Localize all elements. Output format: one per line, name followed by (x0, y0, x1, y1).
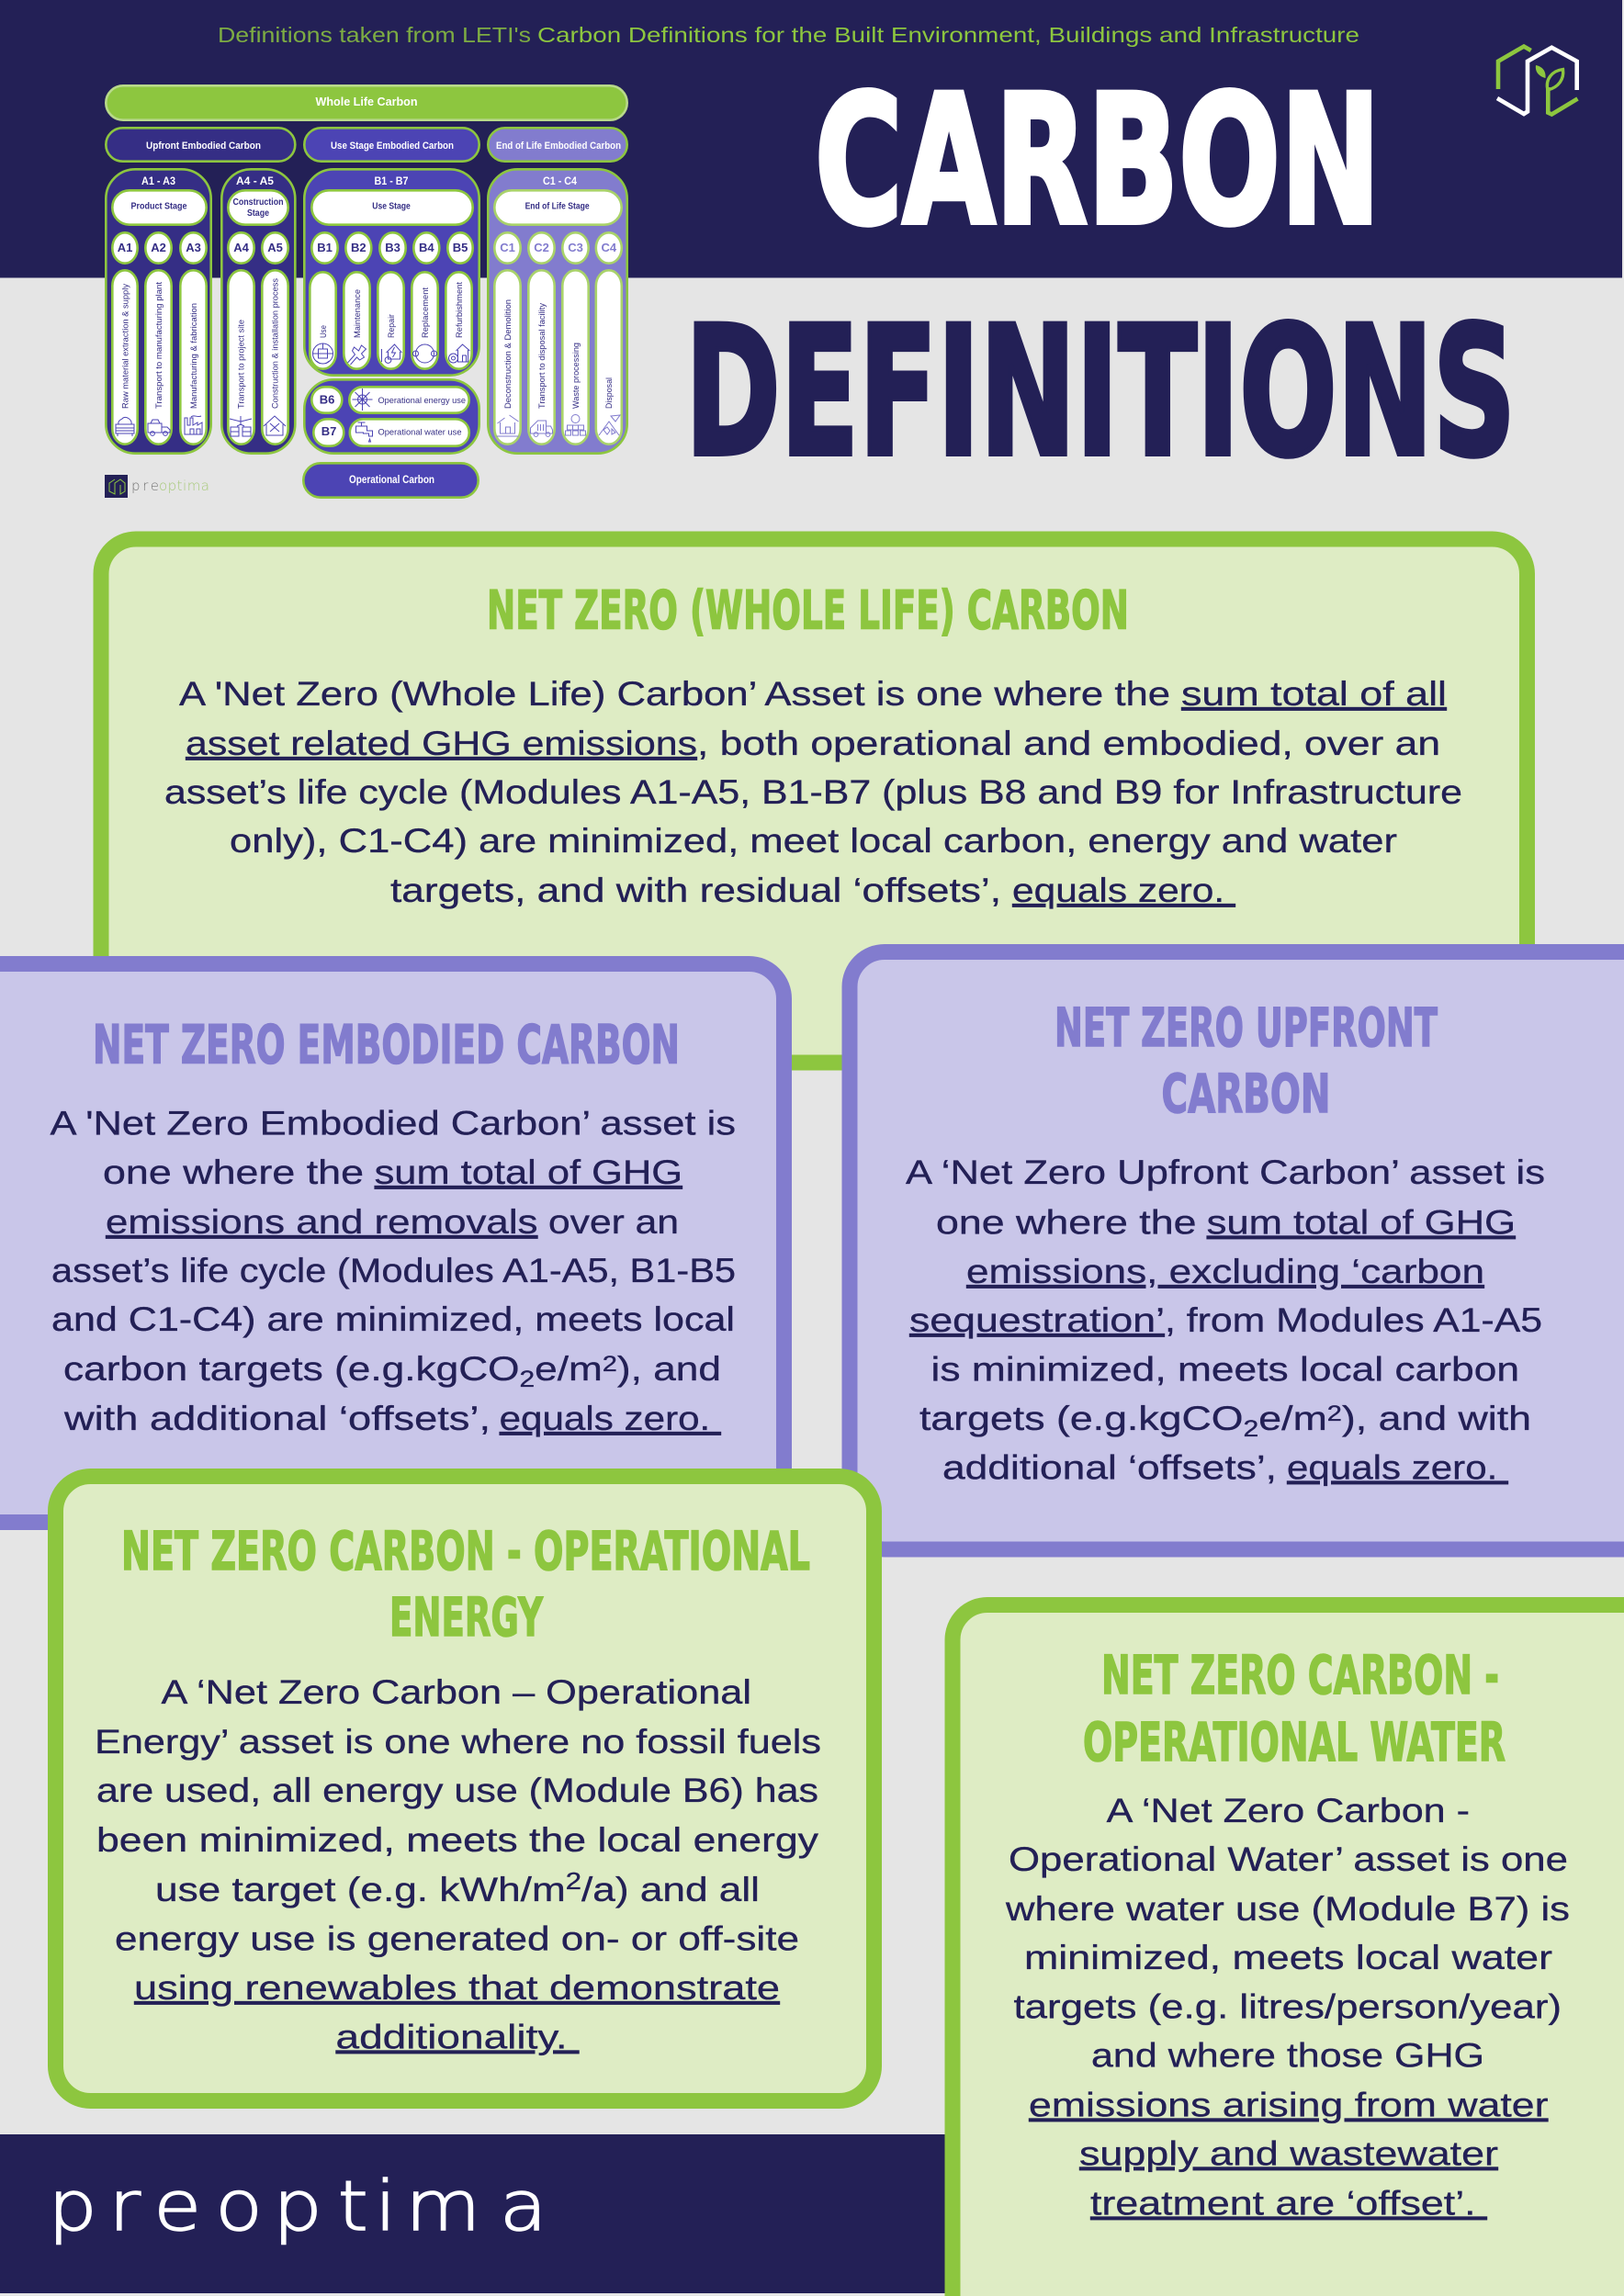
icon: disposal rubble (599, 415, 620, 435)
group: A1 - A3 product stage: A1 - A3 (141, 174, 175, 187)
body text: is minimized, meets local carbon (931, 1350, 1519, 1389)
group: C1 - C4 end of life stage: C1 - C4 (543, 174, 577, 187)
group: C1 - C4 end of life stage (488, 169, 627, 454)
group: A4 - A5 construction stage: Transport to project site (237, 320, 246, 409)
footer band (0, 2134, 955, 2293)
body text: 2 (1327, 1401, 1342, 1426)
body text: , both operational and embodied, over an (697, 725, 1440, 762)
icon: demolished house (496, 415, 518, 436)
group: A1 - A3 product stage: Product Stage (130, 201, 187, 212)
body text: targets, and with residual ‘offsets’, (390, 872, 1001, 909)
panel: net zero carbon operational water (953, 1605, 1624, 2296)
subtitle: source of definitions: Definitions taken from LETI's (218, 23, 531, 47)
body text: one where the (936, 1203, 1196, 1242)
body text: e/m (1258, 1400, 1327, 1437)
group: B1 - B5 use stage: B1 - B7 (375, 174, 409, 187)
heading: NET ZERO (WHOLE LIFE) CARBON (487, 579, 1129, 641)
group: B6 and B7 operational use: Operational water use (378, 428, 461, 437)
group: A1 - A3 product stage: Manufacturing & fabrication (189, 303, 199, 409)
body text: sum total of all (1181, 675, 1447, 713)
body text: supply and wastewater (1079, 2134, 1498, 2173)
logo: preoptima wordmark: preoptima (48, 2166, 547, 2246)
body text: are used, all energy use (Module B6) has (96, 1772, 818, 1809)
pill: Operational Carbon: Operational Carbon (349, 475, 434, 486)
body text: ), and with (1342, 1400, 1531, 1437)
body text: ), and (617, 1350, 721, 1388)
group: B1 - B5 use stage: Use (319, 325, 329, 338)
body text: targets (e.g.kgCO (919, 1400, 1188, 1437)
body text: A 'Net Zero Embodied Carbon’ asset is (50, 1104, 736, 1142)
subtitle: source of definitions (218, 23, 1359, 47)
body text: /a) and all (581, 1871, 760, 1908)
group: C1 - C4 end of life stage: C4 (601, 241, 617, 254)
subtitle: source of definitions: Carbon Definitions for the Built Environment, Buildings and Infrastructure (537, 23, 1359, 47)
body text: minimized, meets local water (1024, 1939, 1552, 1976)
icon: energy sun and snow (353, 388, 373, 411)
group: B1 - B5 use stage (304, 169, 479, 376)
body text: and where those GHG (1091, 2037, 1484, 2074)
body text: over an (548, 1203, 679, 1241)
group: A1 - A3 product stage: Transport to manufacturing plant (154, 282, 164, 409)
group: B1 - B5 use stage: B4 (419, 241, 434, 254)
panel: net zero carbon operational energy (55, 1477, 874, 2101)
heading: CARBON (1161, 1063, 1330, 1125)
body text: asset’s life cycle (Modules A1-A5, B1-B7 (plus B8 and B9 for Infrastructure (164, 773, 1462, 811)
group: C1 - C4 end of life stage: End of Life Stage (525, 201, 590, 212)
body text: sequestration’ (909, 1301, 1165, 1339)
pill: Operational Carbon (303, 463, 479, 498)
body text: using renewables that demonstrate (134, 1969, 780, 2007)
body text (164, 675, 1462, 909)
pill: Whole Life Carbon: Whole Life Carbon (316, 96, 417, 108)
heading: NET ZERO EMBODIED CARBON (93, 1014, 680, 1076)
body text: one where the (103, 1154, 364, 1191)
group: B1 - B5 use stage: B5 (453, 241, 468, 254)
group: A1 - A3 product stage: A1 (118, 241, 132, 254)
body text: Operational Water’ asset is one (1009, 1840, 1568, 1878)
group: A4 - A5 construction stage (221, 169, 295, 454)
body text: with additional ‘offsets’, (63, 1400, 491, 1437)
body text: asset’s life cycle (Modules A1-A5, B1-B5 (51, 1252, 736, 1289)
pill: Upfront Embodied Carbon: Upfront Embodied Carbon (146, 141, 261, 152)
group: A4 - A5 construction stage: Construction (233, 197, 283, 208)
body text: where water use (Module B7) is (1005, 1890, 1570, 1928)
body text: additionality. (336, 2019, 579, 2055)
body text: emissions arising from water (1029, 2087, 1549, 2123)
body text: and C1-C4) are minimized, meets local (51, 1300, 735, 1338)
icon: waste processing barrels (566, 415, 586, 435)
pill: End of Life Embodied Carbon: End of Life Embodied Carbon (496, 141, 621, 152)
group: B1 - B5 use stage: B3 (385, 241, 400, 254)
panel: net zero embodied carbon (0, 964, 784, 1523)
heading: ENERGY (389, 1586, 544, 1649)
body text: been minimized, meets the local energy (96, 1821, 819, 1859)
group: B1 - B5 use stage: Maintenance (353, 289, 363, 338)
body text (906, 1154, 1545, 1486)
body text: targets (e.g. litres/person/year) (1014, 1987, 1562, 2026)
icon: refurbished house (448, 344, 470, 363)
body text: e/m (535, 1350, 603, 1388)
body text: 2 (603, 1352, 617, 1377)
heading: NET ZERO CARBON - OPERATIONAL (121, 1520, 810, 1582)
group: A4 - A5 construction stage: A5 (267, 241, 283, 254)
group: A4 - A5 construction stage: Stage (247, 208, 269, 219)
body text: A ‘Net Zero Upfront Carbon’ asset is (906, 1154, 1545, 1191)
group: C1 - C4 end of life stage: C2 (534, 241, 549, 254)
logo: small preoptima (105, 475, 209, 498)
body text: equals zero. (1287, 1449, 1508, 1486)
group: C1 - C4 end of life stage: Deconstruction & Demolition (503, 299, 513, 409)
body text: use target (e.g. kWh/m (155, 1871, 499, 1908)
diagram: whole life carbon modules (105, 85, 627, 498)
group: C1 - C4 end of life stage: C1 (500, 241, 515, 254)
group: A1 - A3 product stage (106, 169, 211, 454)
heading (121, 1520, 810, 1649)
group: B6 and B7 operational use: B6 (320, 393, 334, 406)
icon: water tap (356, 422, 373, 442)
group: B6 and B7 operational use (304, 379, 479, 454)
icon: use globe (312, 343, 333, 364)
group: A1 - A3 product stage: Raw material extraction & supply (121, 284, 130, 409)
pill: Use Stage Embodied Carbon (304, 128, 479, 162)
body text (95, 1673, 821, 2055)
body text: emissions and removals (106, 1203, 538, 1241)
group: A4 - A5 construction stage: A4 (233, 241, 250, 254)
icon: wrench (347, 345, 366, 365)
icon: refuse truck (531, 421, 553, 436)
pill: Upfront Embodied Carbon (106, 128, 295, 162)
icon: repair house (382, 344, 402, 363)
group: C1 - C4 end of life stage: Disposal (604, 377, 615, 409)
body text: 2 (520, 1367, 535, 1392)
icon: replacement cycle (413, 344, 437, 363)
body text: , from Modules A1-A5 (1165, 1301, 1542, 1339)
icon: factory (185, 416, 202, 434)
icon: plane and vehicles (230, 416, 252, 436)
body text (50, 1104, 736, 1437)
icon: preoptima logo top right (1497, 46, 1578, 114)
heading (1054, 996, 1438, 1125)
body text: only), C1-C4) are minimized, meet local carbon, energy and water (230, 822, 1397, 860)
group: A1 - A3 product stage: A2 (151, 241, 166, 254)
group: B1 - B5 use stage: B2 (351, 241, 367, 254)
body text: equals zero. (500, 1400, 721, 1437)
body text: A 'Net Zero (Whole Life) Carbon’ Asset is one where the (179, 675, 1170, 713)
group: B6 and B7 operational use: Operational energy use (378, 396, 466, 406)
group: C1 - C4 end of life stage: C3 (568, 241, 583, 254)
panel: net zero whole life carbon (101, 539, 1527, 1063)
pill: End of Life Embodied Carbon (488, 128, 627, 162)
pill: Use Stage Embodied Carbon: Use Stage Embodied Carbon (331, 141, 454, 152)
group: A4 - A5 construction stage: Construction & installation process (270, 278, 281, 409)
body text: equals zero. (1012, 872, 1235, 909)
body text: additional ‘offsets’, (942, 1449, 1277, 1486)
icon: house with tools (264, 416, 286, 435)
logo: small preoptima: optima (159, 478, 209, 494)
group: A4 - A5 construction stage: A4 - A5 (236, 174, 274, 187)
body text: asset related GHG emissions (186, 725, 697, 762)
header band (0, 0, 1622, 277)
group: B1 - B5 use stage: B1 (317, 241, 333, 254)
body text: Energy’ asset is one where no fossil fuels (95, 1723, 821, 1761)
heading (1083, 1644, 1506, 1773)
icon: mine cart (116, 417, 134, 436)
body text: 2 (566, 1867, 581, 1895)
body text: sum total of GHG (375, 1154, 682, 1191)
panel: net zero upfront carbon (850, 951, 1624, 1549)
body text: treatment are ‘offset’. (1090, 2184, 1487, 2223)
body text: sum total of GHG (1207, 1203, 1516, 1242)
group: B1 - B5 use stage: Repair (387, 314, 397, 338)
group: B1 - B5 use stage: Refurbishment (455, 282, 465, 338)
body text: A ‘Net Zero Carbon - (1107, 1792, 1470, 1829)
body text: carbon targets (e.g.kgCO (63, 1350, 445, 1388)
body text: energy use is generated on- or off-site (115, 1919, 799, 1958)
logo: small preoptima: pre (131, 478, 159, 494)
group: A1 - A3 product stage: A3 (186, 241, 201, 254)
group: B1 - B5 use stage: Replacement (421, 287, 431, 338)
group: C1 - C4 end of life stage: Waste processing (571, 343, 581, 409)
icon: truck (148, 420, 170, 435)
group: B1 - B5 use stage: Use Stage (372, 201, 411, 212)
pill: Whole Life Carbon (106, 85, 627, 120)
body text (1005, 1792, 1570, 2223)
body text: A ‘Net Zero Carbon – Operational (162, 1673, 751, 1711)
group: B6 and B7 operational use: B7 (321, 424, 336, 438)
body text: 2 (1244, 1416, 1258, 1442)
body text: emissions, excluding ‘carbon (966, 1253, 1484, 1290)
group: C1 - C4 end of life stage: Transport to disposal facility (537, 303, 547, 409)
